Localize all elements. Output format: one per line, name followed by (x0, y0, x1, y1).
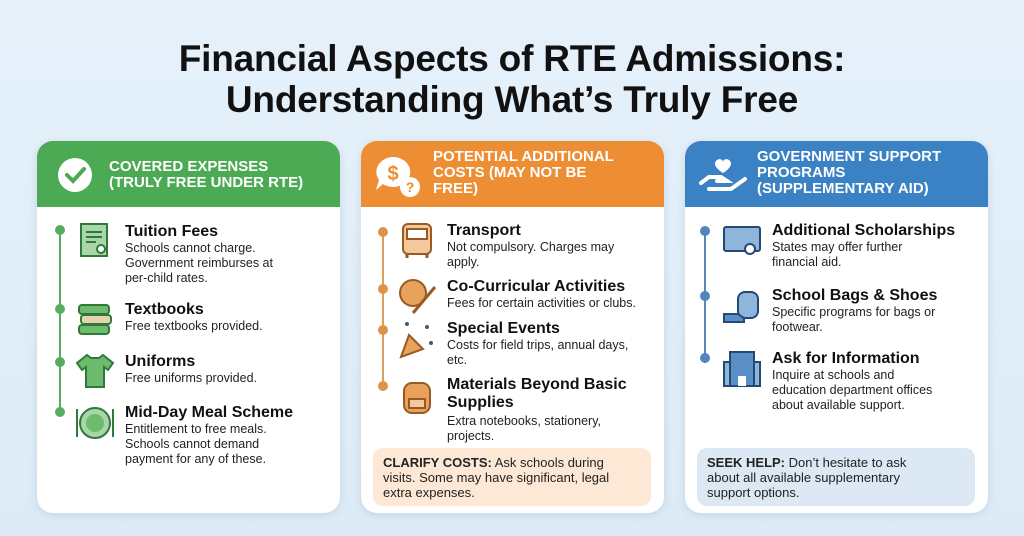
item: tuition fees: Schools cannot charge. (125, 241, 256, 255)
item: materials (447, 376, 627, 443)
item: tuition fees: per-child rates. (125, 271, 208, 285)
item: scholarships: Additional Scholarships (772, 222, 955, 239)
item: uniforms (125, 353, 257, 385)
icon: certificate (723, 226, 761, 255)
header: covered expenses: (TRULY FREE UNDER RTE) (109, 174, 303, 191)
item: ask for information: education department offices (772, 383, 932, 397)
item: scholarships: financial aid. (772, 255, 842, 269)
callout: seek help: about all available supplementary (707, 470, 900, 485)
title: Financial Aspects of RTE Admissions: (179, 38, 845, 79)
header: additional costs: ? (406, 179, 414, 195)
item: transport: apply. (447, 255, 479, 269)
panel: government support (685, 141, 988, 513)
panel: covered expenses (37, 141, 340, 513)
item: textbooks: Free textbooks provided. (125, 319, 263, 333)
item: transport (447, 222, 614, 269)
icon: bag and shoe (723, 291, 759, 323)
callout: clarify costs: extra expenses. (383, 485, 475, 500)
item: scholarships: States may offer further (772, 240, 902, 254)
item: mid-day meal: Mid-Day Meal Scheme (125, 404, 293, 421)
callout: seek help: support options. (707, 485, 800, 500)
item: uniforms: Free uniforms provided. (125, 371, 257, 385)
header: additional costs: COSTS (MAY NOT BE (433, 164, 586, 181)
icon: backpack (403, 382, 431, 414)
header: covered expenses (37, 141, 340, 207)
item: materials: Supplies (447, 394, 514, 411)
item: mid-day meal: payment for any of these. (125, 452, 266, 466)
item: co-curricular (447, 278, 636, 310)
item: transport: Not compulsory. Charges may (447, 240, 614, 254)
item: co-curricular: Co-Curricular Activities (447, 278, 625, 295)
item: tuition fees (125, 223, 273, 285)
callout: seek help: SEEK HELP: Don’t hesitate to ask (707, 455, 906, 470)
item: bags and shoes (772, 287, 937, 334)
header: additional costs: FREE) (433, 180, 478, 197)
item: ask for information: Inquire at schools and (772, 368, 894, 382)
callout: clarify costs (373, 448, 651, 506)
callout: clarify costs: CLARIFY COSTS: Ask schools during (383, 455, 604, 470)
item: textbooks (125, 301, 263, 333)
icon: bus (402, 223, 432, 258)
icon: ball and brush (399, 279, 436, 314)
header: additional costs: POTENTIAL ADDITIONAL (433, 148, 614, 165)
item: tuition fees: Government reimburses at (125, 256, 273, 270)
header: covered expenses: COVERED EXPENSES (109, 158, 268, 175)
header: additional costs (361, 141, 664, 207)
callout: seek help (697, 448, 975, 506)
title: Understanding What’s Truly Free (226, 79, 798, 120)
header: government support (685, 141, 988, 207)
item: textbooks: Textbooks (125, 301, 204, 318)
header: additional costs: $ (387, 163, 399, 185)
item: special events (447, 320, 628, 367)
icon: building (723, 351, 761, 387)
item: mid-day meal: Entitlement to free meals. (125, 422, 267, 436)
callout: clarify costs: visits. Some may have significant, legal (383, 470, 609, 485)
item: special events: etc. (447, 353, 467, 367)
item: co-curricular: Fees for certain activities or clubs. (447, 296, 636, 310)
item: transport: Transport (447, 222, 521, 239)
item: bags and shoes: Specific programs for bags or (772, 305, 935, 319)
header: government support: (SUPPLEMENTARY AID) (757, 180, 929, 197)
item: ask for information: Ask for Information (772, 350, 920, 367)
icon: books (78, 304, 112, 335)
title (179, 38, 845, 120)
icon: meal plate (76, 407, 114, 439)
item: mid-day meal: Schools cannot demand (125, 437, 259, 451)
item: materials: Materials Beyond Basic (447, 376, 627, 393)
item: mid-day meal (125, 404, 293, 466)
item: special events: Special Events (447, 320, 560, 337)
item: ask for information (772, 350, 932, 412)
header: government support: PROGRAMS (757, 164, 845, 181)
panel: potential additional costs (361, 141, 664, 513)
item: tuition fees: Tuition Fees (125, 223, 218, 240)
item: bags and shoes: footwear. (772, 320, 823, 334)
item: uniforms: Uniforms (125, 353, 195, 370)
item: special events: Costs for field trips, annual days, (447, 338, 628, 352)
icon: scroll (80, 223, 108, 257)
item: scholarships (772, 222, 955, 269)
item: ask for information: about available support. (772, 398, 905, 412)
icon: party popper (399, 322, 433, 359)
header: government support: GOVERNMENT SUPPORT (757, 148, 941, 165)
item: bags and shoes: School Bags & Shoes (772, 287, 937, 304)
item: materials: Extra notebooks, stationery, (447, 414, 601, 428)
item: materials: projects. (447, 429, 494, 443)
icon: shirt (76, 354, 114, 388)
